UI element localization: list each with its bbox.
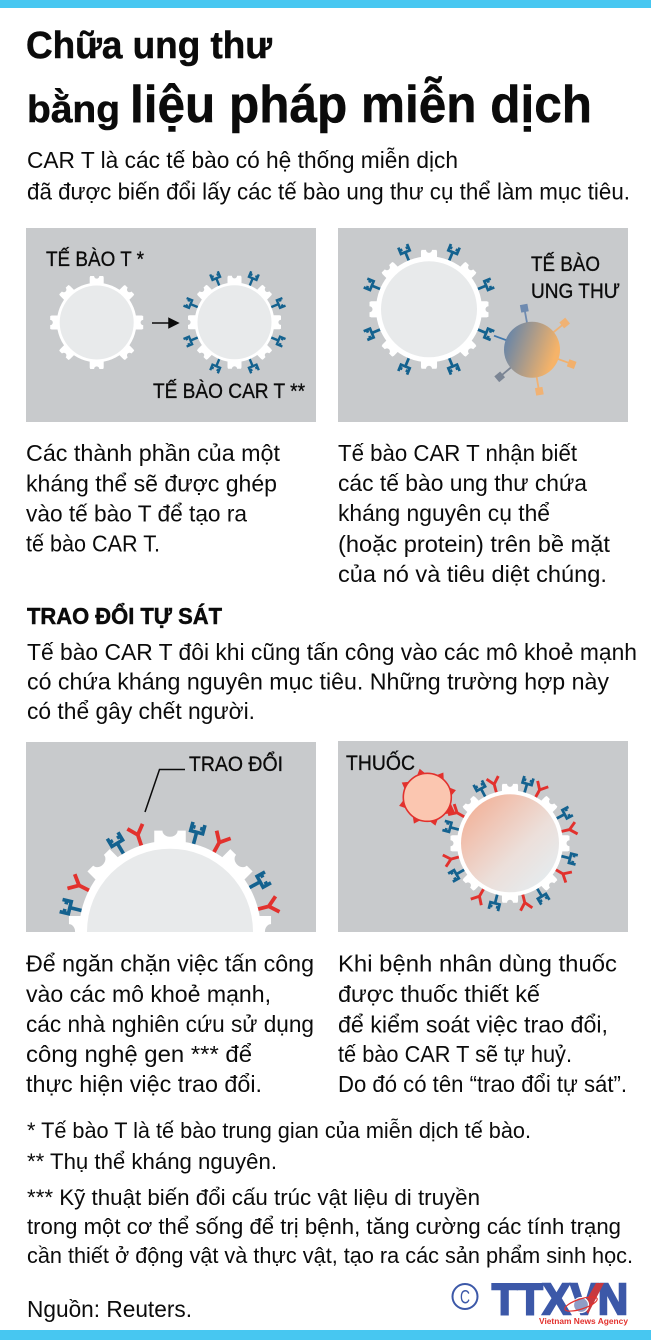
- callout: switch leader line: [145, 770, 185, 812]
- text: panel 2 caption: (hoặc protein) trên bề mặt: [338, 531, 611, 557]
- panel: T cell to CAR T cell: [26, 228, 316, 422]
- footnotes: *** Kỹ thuật biến đổi cấu trúc vật liệu di truyền: [27, 1185, 480, 1210]
- text: panel 3 caption: các nhà nghiên cứu sử dụng: [26, 1011, 314, 1037]
- label: T cell: TẾ BÀO T *: [46, 248, 144, 271]
- text: panel 2 caption: của nó và tiêu diệt chúng.: [338, 561, 607, 587]
- panel: switch detail: [26, 742, 316, 932]
- footnotes: trong một cơ thể sống để trị bệnh, tăng cường các tính trạng: [27, 1214, 621, 1239]
- footnotes: * Tế bào T là tế bào trung gian của miễn dịch tế bào.: [27, 1118, 531, 1143]
- icon: cancer cell: [494, 304, 577, 396]
- label: cancer cell: TẾ BÀO: [531, 253, 600, 276]
- logo: TTXVN: TTXVN: [492, 1275, 628, 1324]
- title: Chữa ung thư: [26, 25, 272, 67]
- icon: copyright: C: [460, 1288, 470, 1308]
- text: panel 4 caption: Do đó có tên “trao đổi tự sát”.: [338, 1071, 627, 1097]
- text: suicide switch description: Tế bào CAR T đôi khi cũng tấn công vào các mô khoẻ mạnh: [27, 639, 637, 665]
- arrow: [152, 318, 178, 328]
- label: cancer cell: [531, 253, 620, 303]
- label: drug: THUỐC: [346, 751, 415, 775]
- intro text: đã được biến đổi lấy các tế bào ung thư cụ thể làm mục tiêu.: [27, 178, 630, 204]
- text: panel 3 caption: Để ngăn chặn việc tấn công: [26, 951, 314, 977]
- bottom bar: [0, 1330, 651, 1340]
- icon: globe emblem: [563, 1283, 604, 1314]
- text: panel 2 caption: [338, 440, 611, 587]
- label: switch: TRAO ĐỔI: [189, 752, 283, 776]
- icon: CAR T cell with switches: [442, 776, 578, 911]
- icon: CAR T cell large: [364, 244, 494, 375]
- text: panel 3 caption: vào các mô khoẻ mạnh,: [26, 981, 271, 1007]
- text: panel 3 caption: [26, 951, 314, 1097]
- source: Nguồn: Reuters.: [27, 1296, 192, 1322]
- agency name: Vietnam News Agency: [539, 1316, 628, 1326]
- heading: suicide switch: TRAO ĐỔI TỰ SÁT: [27, 602, 222, 629]
- intro text: [27, 147, 630, 204]
- text: panel 1 caption: tế bào CAR T.: [26, 530, 160, 556]
- title: [26, 25, 592, 134]
- footnotes: [27, 1118, 633, 1268]
- text: suicide switch description: có thể gây chết người.: [27, 698, 255, 724]
- label: CAR T cell: TẾ BÀO CAR T **: [153, 380, 305, 403]
- icon: cell with switches: [59, 822, 280, 932]
- text: panel 2 caption: các tế bào ung thư chứa: [338, 470, 587, 496]
- icon: copyright: [452, 1284, 478, 1309]
- icon: CAR T cell: [183, 271, 286, 373]
- footnotes: ** Thụ thể kháng nguyên.: [27, 1149, 277, 1174]
- top bar: [0, 0, 651, 8]
- intro text: CAR T là các tế bào có hệ thống miễn dịch: [27, 147, 458, 173]
- panel: CAR T cell recognises cancer cell: [338, 228, 628, 422]
- text: panel 4 caption: Khi bệnh nhân dùng thuốc: [338, 951, 617, 977]
- text: panel 1 caption: vào tế bào T để tạo ra: [26, 500, 247, 526]
- text: panel 2 caption: Tế bào CAR T nhận biết: [338, 440, 578, 466]
- text: suicide switch description: có chứa kháng nguyên mục tiêu. Những trường hợp này: [27, 668, 609, 694]
- text: panel 3 caption: công nghệ gen *** để: [26, 1041, 252, 1067]
- text: panel 1 caption: kháng thể sẽ được ghép: [26, 470, 277, 496]
- panel: drug triggers self destruct: [338, 741, 628, 932]
- footnotes: cần thiết ở động vật và thực vật, tạo ra các sản phẩm sinh học.: [27, 1243, 633, 1268]
- text: panel 1 caption: Các thành phần của một: [26, 440, 281, 466]
- icon: drug: [398, 768, 458, 827]
- text: panel 3 caption: thực hiện việc trao đổi.: [26, 1071, 262, 1097]
- text: panel 4 caption: tế bào CAR T sẽ tự huỷ.: [338, 1041, 572, 1067]
- title: liệu pháp miễn dịch: [130, 76, 592, 134]
- text: panel 4 caption: để kiểm soát việc trao đổi,: [338, 1012, 608, 1038]
- text: panel 4 caption: [338, 951, 627, 1097]
- text: panel 4 caption: được thuốc thiết kế: [338, 981, 540, 1007]
- text: panel 1 caption: [26, 440, 281, 556]
- text: panel 2 caption: kháng nguyên cụ thể: [338, 500, 550, 526]
- text: suicide switch description: [27, 639, 637, 724]
- title: bằng: [27, 87, 120, 131]
- icon: T cell: [50, 276, 143, 369]
- label: cancer cell: UNG THƯ: [531, 280, 620, 303]
